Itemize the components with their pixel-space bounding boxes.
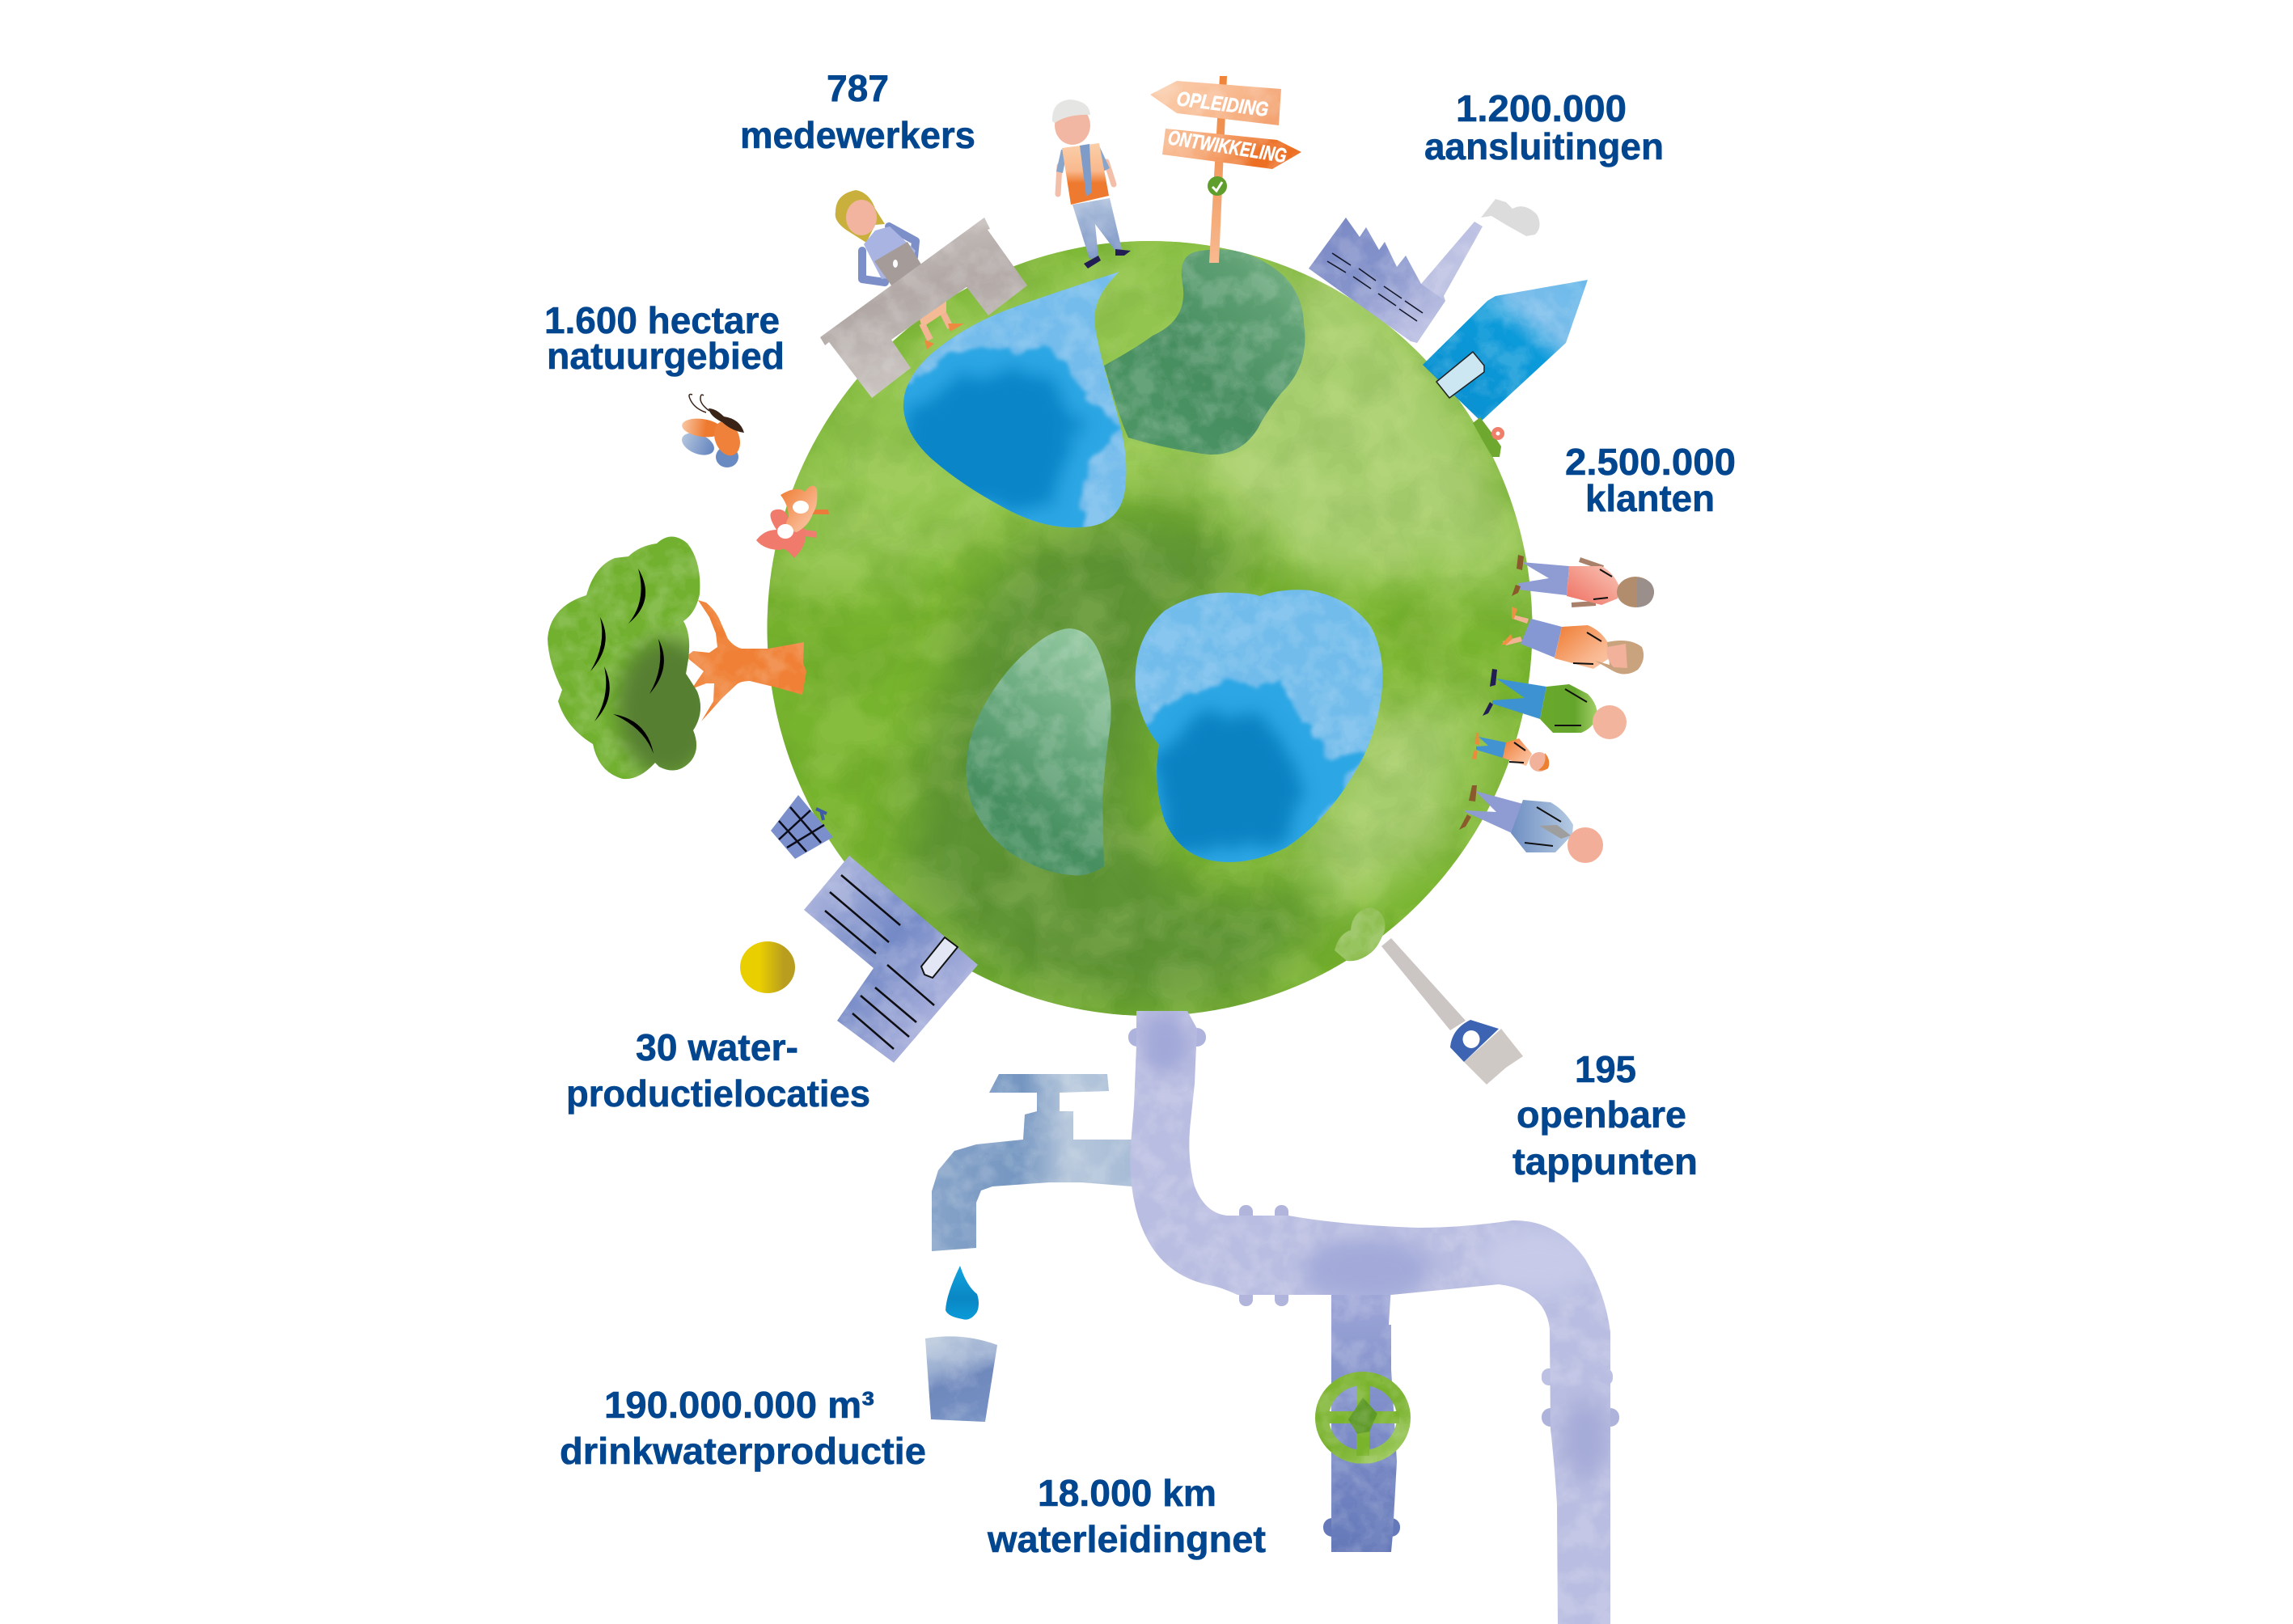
icon: yellow ball: [740, 941, 795, 993]
person: customer in orange shirt: [1501, 607, 1644, 675]
worker shirt and vest: [1062, 143, 1109, 205]
icon: solar panel: [771, 795, 833, 859]
stat: 30 waterproductielocaties: [566, 1026, 870, 1114]
icon: factory: [1309, 199, 1540, 343]
lake: upper right green: [1104, 249, 1305, 455]
pipe flanges: [1128, 1028, 1619, 1427]
employee torso: [864, 226, 916, 279]
bush at tap: [1335, 907, 1385, 961]
tree trunk: [686, 600, 806, 721]
person: customer in jacket: [1459, 785, 1603, 863]
worker arms: [1058, 162, 1114, 194]
sign: opleiding: OPLEIDING: [1175, 87, 1270, 121]
person: customer in green shirt: [1483, 669, 1627, 739]
stat: 787 medewerkers: 787: [827, 67, 889, 109]
desk: [820, 218, 1027, 398]
icon: water drop: [946, 1266, 979, 1320]
worker legs: [1072, 198, 1122, 259]
stat: 18.000 km waterleidingnet: 18.000 km: [1038, 1472, 1216, 1514]
sign: opleiding: [1150, 81, 1281, 125]
tree: [542, 526, 806, 785]
stat: 1.200.000 aansluitingen: 1.200.000: [1456, 87, 1627, 129]
stat: 2.500.000 klanten: [1565, 441, 1736, 519]
signpost pole: [1209, 76, 1227, 263]
tap head: [1450, 1020, 1499, 1062]
water pipe network: [1124, 1007, 1619, 1624]
stat: 18.000 km waterleidingnet: [987, 1472, 1266, 1560]
employee hair: [836, 190, 885, 243]
house window: [1436, 352, 1484, 398]
stat: 1.200.000 aansluitingen: aansluitingen: [1424, 125, 1664, 167]
laptop: [874, 242, 921, 285]
employee face: [846, 200, 877, 235]
tree crown: [548, 537, 700, 780]
stat: 190.000.000 m3 drinkwaterproductie: [560, 1384, 926, 1472]
factory building: [1309, 218, 1445, 343]
main pipe: [1124, 1007, 1618, 1624]
tap pole: [1381, 938, 1466, 1030]
stat: 1.600 hectare natuurgebied: natuurgebied: [547, 335, 785, 377]
stat: 1.200.000 aansluitingen: [1424, 87, 1664, 167]
lake: upper left blue: [903, 272, 1126, 527]
stat: 2.500.000 klanten: klanten: [1585, 477, 1715, 519]
person: customer in pink shirt: [1512, 555, 1654, 607]
icon: green valve wheel: [1322, 1377, 1404, 1457]
tap base: [1464, 1029, 1523, 1085]
building windows: [825, 875, 934, 1049]
employee legs: [922, 311, 950, 340]
person: child: [1472, 733, 1549, 772]
pipe branch: [1323, 1286, 1400, 1552]
stat: 195 openbare tappunten: openbare: [1517, 1093, 1686, 1136]
icon: check mark: [1208, 176, 1227, 196]
icon: small bush with flower: [1473, 417, 1504, 457]
lake: lower left green: [962, 623, 1116, 882]
icon: signpost: [1150, 76, 1301, 263]
icon: production building: [804, 856, 978, 1063]
icon: public tap point: [1335, 907, 1523, 1085]
stat: 195 openbare tappunten: tappunten: [1512, 1140, 1698, 1182]
worker helmet: [1052, 99, 1090, 123]
stat: 2.500.000 klanten: 2.500.000: [1565, 441, 1736, 483]
building door: [921, 937, 958, 978]
stat: 787 medewerkers: medewerkers: [740, 114, 975, 156]
stat: 30 waterproductielocaties: 30 water-: [636, 1026, 798, 1068]
stat: 787 medewerkers: [740, 67, 975, 156]
stat: 195 openbare tappunten: [1512, 1048, 1698, 1182]
icon: glass of water: [925, 1336, 997, 1422]
icon: butterfly: [679, 395, 745, 467]
factory windows: [1327, 253, 1423, 321]
worker sleeves: [1056, 144, 1110, 173]
icon: desk with employee: [820, 190, 1027, 398]
stat: 190.000.000 m3 drinkwaterproductie: 190.000.000 m³: [604, 1384, 874, 1426]
stat: 30 waterproductielocaties: productielocaties: [566, 1072, 870, 1114]
icon: flowers: [756, 486, 829, 558]
faucet: [932, 1074, 1132, 1251]
factory smoke: [1481, 199, 1540, 236]
icon: house: [1423, 280, 1588, 421]
infographic canvas: [547, 74, 1734, 1624]
sign: ontwikkeling: ONTWIKKELING: [1166, 126, 1288, 167]
stat: 1.600 hectare natuurgebied: [544, 299, 785, 377]
globe: [760, 235, 1537, 1023]
lake: lower right blue: [1136, 590, 1383, 862]
worker head: [1055, 106, 1090, 145]
stat: 18.000 km waterleidingnet: waterleidingnet: [987, 1518, 1266, 1560]
stat: 1.600 hectare natuurgebied: 1.600 hectare: [544, 299, 780, 341]
icon: worker: [1052, 99, 1131, 269]
factory chimney: [1407, 222, 1483, 343]
stat: 190.000.000 m3 drinkwaterproductie: drinkwaterproductie: [560, 1430, 926, 1472]
stat: 195 openbare tappunten: 195: [1575, 1048, 1636, 1090]
employee arms: [862, 226, 916, 282]
